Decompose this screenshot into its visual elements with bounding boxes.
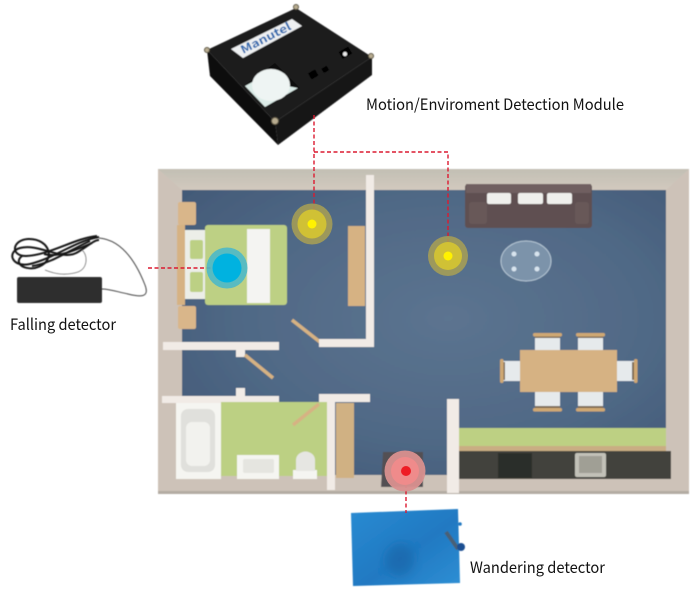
bathroom xyxy=(176,402,354,479)
sofa xyxy=(465,184,592,228)
motion sensor marker: living room xyxy=(428,236,468,276)
PIR sensor dome xyxy=(245,63,300,108)
interior walls xyxy=(162,175,459,493)
floor plan xyxy=(158,169,689,494)
hallway door xyxy=(245,355,273,378)
dining table and chairs xyxy=(500,333,638,412)
blue floor xyxy=(182,190,666,475)
label: wandering detector: Wandering detector xyxy=(470,556,606,578)
falling detector device xyxy=(12,236,146,303)
motion/environment detection module xyxy=(204,4,374,145)
outer walls xyxy=(158,169,689,494)
bedroom xyxy=(177,202,365,342)
label: falling detector: Falling detector xyxy=(10,313,117,335)
brand label: Manutel xyxy=(238,18,294,58)
entrance mat xyxy=(381,452,423,487)
wandering detector mat xyxy=(351,509,465,586)
thin wire xyxy=(99,238,146,296)
dashed connector lines xyxy=(148,115,448,513)
glass coffee table xyxy=(501,241,551,281)
sensor pad xyxy=(17,277,102,303)
motion sensor marker: bedroom xyxy=(292,204,332,244)
kitchen xyxy=(459,428,671,479)
cable bundle xyxy=(12,236,99,268)
brand label xyxy=(231,18,302,58)
wandering sensor marker: entrance xyxy=(384,450,426,492)
label: motion module: Motion/Enviroment Detection Module xyxy=(366,93,624,115)
falling sensor marker: bed xyxy=(206,248,248,288)
